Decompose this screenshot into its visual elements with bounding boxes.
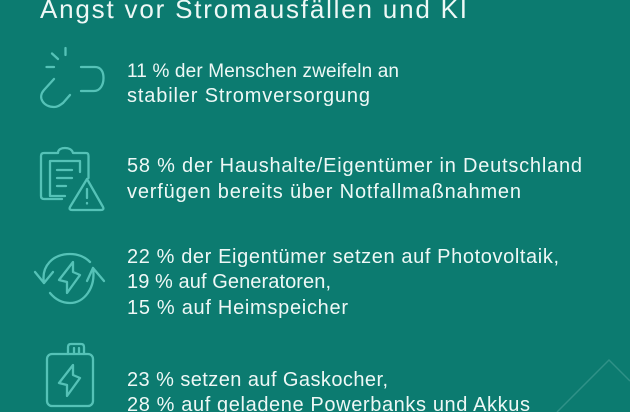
text block: stable power supply — [127, 61, 399, 107]
text block: photovoltaics, generators, storage: 19 % auf Generatoren, — [127, 271, 331, 293]
text block: photovoltaics, generators, storage: 15 % auf Heimspeicher — [127, 297, 348, 319]
text block: gas stoves and power banks: 23 % setzen auf Gaskocher, — [127, 369, 388, 391]
icon: broken chain link — [41, 48, 104, 107]
text block: gas stoves and power banks — [127, 369, 530, 412]
text block: stable power supply: stabiler Stromversorgung — [127, 85, 370, 107]
text block: emergency measures: verfügen bereits über Notfallmaßnahmen — [127, 181, 521, 203]
text block: photovoltaics, generators, storage — [127, 246, 559, 319]
text block: photovoltaics, generators, storage: 22 % der Eigentümer setzen auf Photovoltaik, — [127, 246, 559, 268]
icon: energy cycle arrows — [35, 254, 104, 303]
text block: emergency measures — [127, 155, 582, 203]
text block: emergency measures: 58 % der Haushalte/Eigentümer in Deutschland — [127, 155, 582, 177]
icon: power bank — [47, 344, 93, 406]
icon: clipboard with warning triangle — [41, 148, 103, 210]
decorative triangle outline — [557, 360, 630, 412]
text block: stable power supply: 11 % der Menschen zweifeln an — [127, 61, 399, 82]
